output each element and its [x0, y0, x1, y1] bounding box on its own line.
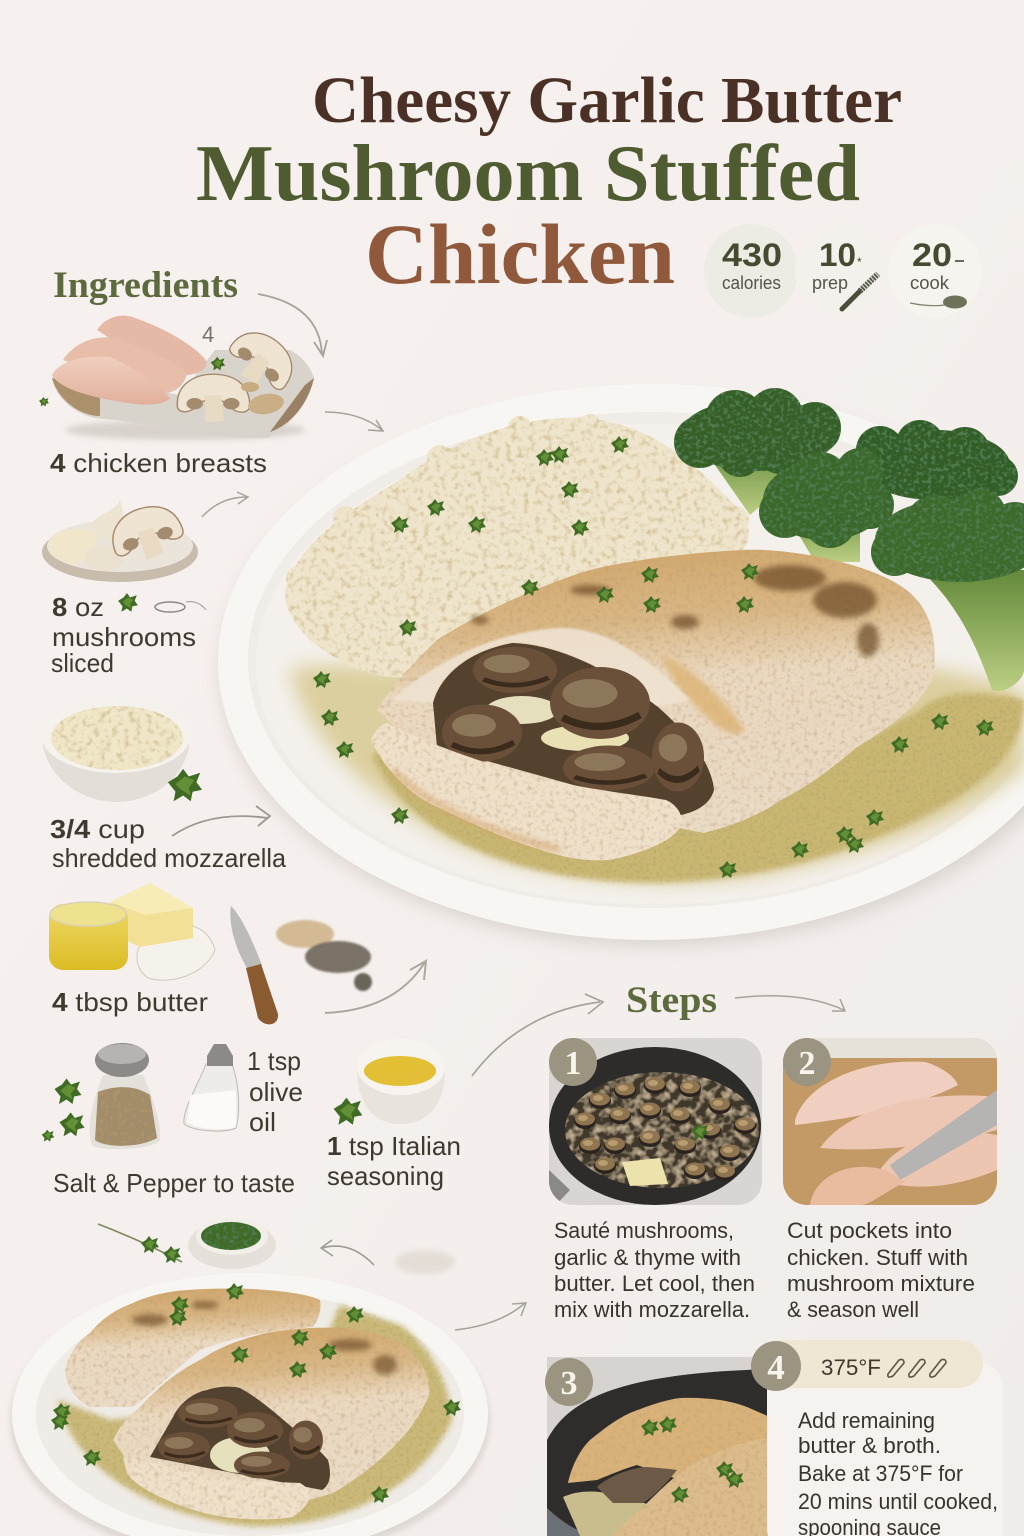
arrow: to steps heading — [472, 994, 603, 1076]
garnish: herbs and small bowl — [98, 1217, 455, 1274]
number 3 — [545, 1358, 593, 1406]
label: 3/4 cup — [50, 814, 145, 844]
text: garlic & thyme with — [554, 1245, 741, 1270]
icon: herb and spoon — [118, 593, 206, 612]
ingredient: mozzarella — [41, 697, 287, 873]
text: & season well — [787, 1297, 919, 1322]
step 3 — [545, 1357, 770, 1536]
text: 20 mins until cooked, — [798, 1489, 998, 1514]
ingredient: mushrooms — [42, 492, 248, 678]
number 4 — [751, 1341, 801, 1391]
sauce pool — [290, 654, 1024, 882]
stems — [715, 440, 790, 515]
plate — [10, 1278, 490, 1536]
step 4 — [751, 1340, 1003, 1536]
title — [196, 64, 902, 302]
arrow: plate to steps — [455, 1303, 526, 1330]
text: Bake at 375°F for — [798, 1461, 963, 1486]
lower flap — [123, 1457, 311, 1519]
text — [554, 1218, 755, 1322]
sauce — [58, 1305, 452, 1526]
plate — [218, 384, 1024, 940]
herbs — [51, 1283, 461, 1503]
broccoli — [674, 388, 1024, 691]
text: mushroom mixture — [787, 1271, 975, 1296]
arrow — [202, 492, 248, 517]
ingredient: mozzarella: shredded mozzarella — [52, 843, 287, 873]
photo: cutting chicken — [783, 1038, 997, 1205]
badge: calories — [704, 224, 798, 318]
title: Chicken — [365, 206, 675, 302]
arrow: ingredients to board — [258, 294, 327, 356]
step 2 — [783, 1038, 997, 1322]
label continued: mushrooms — [52, 622, 196, 652]
rear chicken — [65, 1288, 321, 1407]
heading: ingredients: Ingredients — [53, 265, 238, 306]
text — [787, 1218, 975, 1322]
icon: bowl of shredded cheese — [41, 697, 202, 802]
front chicken — [113, 1328, 429, 1500]
herb garnish — [313, 436, 994, 878]
lower flap — [371, 723, 682, 860]
filling — [150, 1387, 330, 1490]
text: olive oil: oil — [249, 1107, 276, 1137]
temperature pill: 375°F — [821, 1355, 881, 1380]
stat badges — [704, 222, 982, 318]
text: olive oil — [247, 1046, 303, 1137]
ingredient: Italian seasoning: seasoning — [327, 1161, 444, 1191]
badge: cook: cook — [910, 273, 950, 293]
text: olive oil: 1 tsp — [247, 1046, 301, 1076]
title: Mushroom Stuffed — [196, 130, 860, 218]
arrow: board to plate — [325, 412, 383, 431]
cavity filling — [433, 643, 714, 815]
arrow: steps onward — [735, 996, 845, 1011]
badge: prep — [795, 222, 889, 316]
finished plate — [10, 1273, 490, 1536]
ingredient: chicken breasts — [39, 316, 314, 478]
label: 4 tbsp butter — [52, 987, 208, 1017]
text: Add remaining — [798, 1408, 935, 1433]
number 2 — [783, 1038, 831, 1086]
card — [767, 1363, 1003, 1536]
title: Cheesy Garlic Butter — [312, 64, 902, 137]
label: Salt & Pepper to taste — [53, 1168, 295, 1198]
step 1 — [549, 1038, 762, 1322]
photo: mushroom pan — [549, 1038, 762, 1205]
main plate — [218, 384, 1024, 946]
ingredient: Italian seasoning — [327, 1039, 461, 1191]
badge: prep: prep — [812, 273, 848, 293]
mushrooms — [574, 1078, 756, 1181]
temperature pill — [760, 1340, 983, 1388]
text: butter & broth. — [798, 1433, 941, 1458]
icon: garlic and mushroom plate — [42, 498, 198, 582]
text: butter. Let cool, then — [554, 1271, 755, 1296]
badge: cook: 20 — [912, 237, 952, 273]
arrow — [325, 961, 426, 1013]
icon: chicken on board: 4 — [202, 322, 214, 347]
number 4: 4 — [767, 1348, 785, 1387]
plate shadow — [221, 398, 1024, 946]
stuffed chicken — [371, 550, 935, 860]
heading: steps: Steps — [626, 980, 717, 1021]
text: mix with mozzarella. — [554, 1297, 750, 1322]
label: 4 chicken breasts — [50, 448, 267, 478]
text: olive oil: olive — [249, 1077, 303, 1107]
ingredient: butter — [49, 883, 426, 1024]
label: 1 tsp Italian — [327, 1131, 461, 1161]
icon: pepper shaker — [42, 1043, 160, 1149]
arrow — [172, 806, 270, 836]
chicken body — [377, 550, 935, 833]
text — [798, 1408, 998, 1536]
number 1 — [549, 1038, 597, 1086]
icon: spice piles — [276, 920, 372, 991]
rice — [285, 414, 749, 677]
ingredient: salt and pepper — [42, 1043, 303, 1198]
number 1: 1 — [564, 1045, 582, 1082]
florets — [674, 388, 841, 477]
icon: oil bowl — [334, 1039, 445, 1125]
sauce core — [372, 693, 1024, 883]
icon: butter jar, block, onion — [49, 883, 215, 980]
photo: chicken in pan — [547, 1357, 770, 1536]
badge: cook — [888, 224, 982, 318]
charred marks — [132, 1301, 397, 1375]
text: Cut pockets into — [787, 1218, 952, 1243]
ingredient: mushrooms: sliced — [51, 648, 114, 678]
number 2: 2 — [798, 1045, 816, 1082]
badge: calories: calories — [722, 273, 781, 293]
badge: prep: * — [857, 255, 862, 269]
golden cut edge — [660, 655, 745, 734]
charred spots — [471, 565, 879, 657]
icon: salt shaker — [184, 1044, 239, 1131]
badge: prep: 10 — [819, 237, 856, 273]
text: chicken. Stuff with — [787, 1245, 968, 1270]
icon: chicken on board — [39, 316, 314, 440]
icon: knife — [230, 906, 278, 1024]
badge: calories: 430 — [722, 237, 782, 273]
text: Sauté mushrooms, — [554, 1218, 734, 1243]
upper cut flesh — [392, 628, 690, 707]
label: 8 oz — [52, 592, 104, 622]
number 3: 3 — [560, 1365, 578, 1402]
